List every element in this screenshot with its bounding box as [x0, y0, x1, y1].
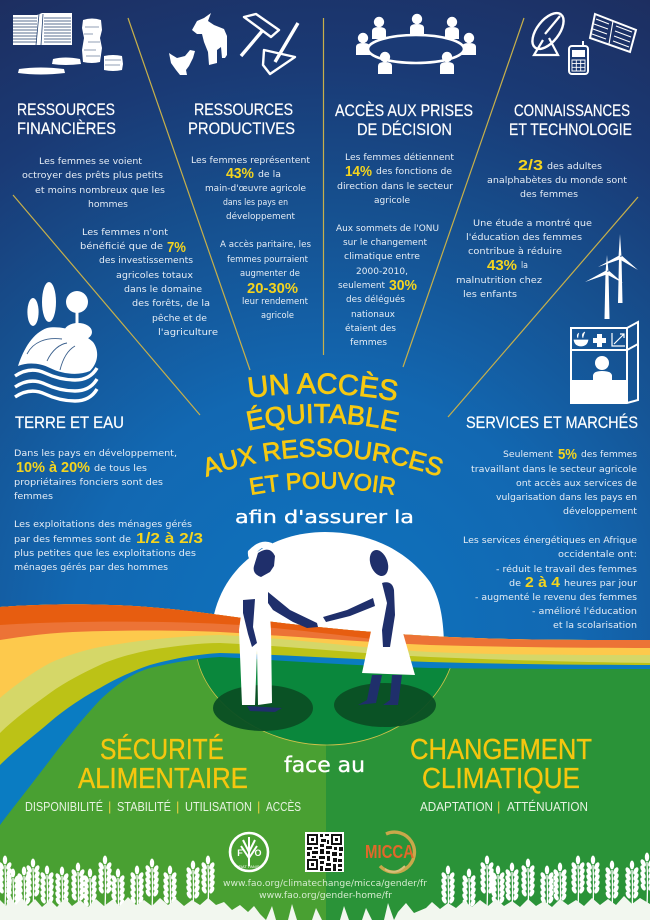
tags: climate actions: | — [497, 799, 500, 814]
heading: changement climatique — [410, 734, 592, 795]
panel: connaissances et technologie — [456, 8, 636, 300]
text block: pêche et de — [152, 313, 207, 324]
icon: goat, hen and tools — [169, 13, 298, 75]
icon: hill, trees and water — [15, 282, 97, 401]
logo: MICCA — [365, 832, 414, 872]
tags: food security dimensions: STABILITÉ — [117, 799, 171, 814]
text block: dans le domaine — [124, 284, 202, 295]
text block: - augmenté le revenu des femmes — [475, 592, 637, 603]
heading: DE DÉCISION — [357, 120, 452, 139]
title: un accès équitable aux ressources et pouvoir: AUX RESSOURCES — [206, 438, 443, 478]
text block — [463, 446, 637, 631]
text block: - amélioré l'éducation — [532, 606, 637, 617]
text block: main-d'œuvre agricole — [205, 183, 306, 194]
text block: 43% — [226, 165, 254, 182]
heading: PRODUCTIVES — [188, 120, 295, 138]
panel: terre et eau — [14, 282, 203, 573]
tags: food security dimensions: | — [257, 799, 260, 814]
icon: wind turbines — [585, 234, 638, 319]
text block: nationaux — [351, 309, 396, 320]
text block: femmes pourraient — [227, 254, 308, 265]
text block: des investissements — [99, 255, 193, 266]
text block: femmes — [14, 491, 53, 502]
text block: hommes — [88, 199, 128, 210]
text block: 7% — [167, 239, 186, 256]
text block: octroyer des prêts plus petits — [22, 170, 163, 181]
text block — [22, 156, 218, 338]
text block: 2000-2010, — [356, 266, 408, 277]
rainbow band — [0, 590, 650, 825]
text block: propriétaires fonciers sont des — [14, 477, 163, 488]
text block: sur le changement — [343, 237, 427, 248]
text block: malnutrition chez — [456, 275, 542, 286]
text block: des forêts, de la — [132, 298, 210, 309]
text block: et la scolarisation — [553, 620, 637, 631]
subtitle: afin d'assurer la: afin d'assurer la — [235, 507, 414, 528]
heading — [509, 102, 632, 139]
text block: les enfants — [463, 289, 517, 300]
tags: food security dimensions: | — [176, 799, 179, 814]
figure: man — [239, 542, 318, 712]
text block: contribue à réduire — [468, 246, 562, 257]
heading: sécurité alimentaire: ALIMENTAIRE — [78, 763, 248, 795]
text block: de — [509, 578, 521, 589]
heading: ACCÈS AUX PRISES — [335, 101, 473, 120]
text block: 43% — [487, 257, 517, 274]
heading: RESSOURCES — [17, 101, 115, 119]
text block: plus petites que les exploitations des — [14, 548, 196, 559]
heading: sécurité alimentaire — [78, 733, 248, 795]
text block: Les femmes détiennent — [345, 152, 454, 163]
text block: Les femmes se voient — [39, 156, 142, 167]
heading: TERRE ET EAU — [15, 414, 124, 432]
heading — [17, 101, 116, 138]
panel: services et marchés — [463, 234, 638, 631]
text block: 20-30% — [247, 280, 298, 297]
text block: agricole — [261, 310, 294, 321]
text block: des fonctions de — [376, 166, 452, 177]
text block: direction dans le secteur — [337, 181, 453, 192]
web links — [223, 879, 427, 901]
tags: food security dimensions: DISPONIBILITÉ — [25, 799, 103, 814]
text block: analphabètes du monde sont — [487, 175, 627, 186]
tags: food security dimensions — [25, 799, 301, 814]
text block: seulement — [338, 280, 385, 291]
text block: développement — [563, 506, 637, 517]
text block: Les femmes n'ont — [82, 227, 168, 238]
tags: climate actions — [420, 799, 588, 814]
text block: des femmes — [581, 449, 637, 460]
text block: 30% — [389, 277, 417, 294]
title: un accès équitable aux ressources et pouvoir — [206, 371, 443, 496]
text block: l'agriculture — [158, 327, 218, 338]
green ground — [0, 645, 650, 920]
figure: woman — [323, 547, 415, 705]
logo: FAO: F — [237, 848, 243, 858]
text block: occidentale ont: — [558, 549, 637, 560]
heading — [188, 101, 295, 138]
text block: des femmes — [520, 189, 578, 200]
text block: dans les pays en — [223, 197, 288, 208]
icon: market stall — [571, 322, 638, 403]
text block — [191, 155, 311, 321]
QR code — [305, 832, 344, 872]
text block: vulgarisation dans les pays en — [496, 492, 637, 503]
subtitle: face au: face au — [284, 753, 365, 777]
logo: FAO: O — [254, 848, 262, 858]
tags: food security dimensions: UTILISATION — [185, 799, 252, 814]
wheat field — [0, 852, 650, 920]
text block: 2/3 — [518, 157, 543, 174]
text block: par des femmes sont de — [14, 534, 131, 545]
dark green circle under figures — [196, 650, 455, 745]
tags: food security dimensions: ACCÈS — [266, 799, 301, 814]
text block: Les exploitations des ménages gérés — [14, 519, 192, 530]
heading: changement climatique: CLIMATIQUE — [422, 763, 580, 795]
heading — [335, 101, 473, 139]
text block: de la — [258, 169, 281, 180]
text block: ont accès aux services de — [516, 478, 637, 489]
panel: ressources financières — [13, 13, 218, 338]
text block: augmenter de — [240, 268, 300, 279]
text block — [14, 448, 203, 573]
text block: ménages gérés par des hommes — [14, 562, 168, 573]
text block: et moins nombreux que les — [35, 185, 165, 196]
text block: heures par jour — [564, 578, 637, 589]
text block: de tous les — [94, 463, 147, 474]
logo: FAO: FIAT PANIS — [238, 864, 260, 869]
text block: 2 à 4 — [525, 574, 561, 591]
shadow ellipses under figures — [213, 683, 436, 731]
text block: Dans les pays en développement, — [14, 448, 177, 459]
text block — [456, 157, 627, 300]
logo: MICCA: MICCA — [365, 842, 414, 862]
text block: - réduit le travail des femmes — [496, 564, 637, 575]
tags: climate actions: ADAPTATION — [420, 799, 493, 814]
text block: Les femmes représentent — [191, 155, 310, 166]
text block: Les services énergétiques en Afrique — [463, 535, 637, 546]
text block: étaient des — [345, 323, 396, 334]
icon: money stacks and coins — [13, 13, 123, 74]
panel: ressources productives — [169, 13, 311, 321]
tags: climate actions: ATTÉNUATION — [507, 799, 588, 814]
text block: 14% — [345, 163, 372, 180]
text block — [336, 152, 454, 348]
text block: 10% à 20% — [16, 459, 90, 476]
text block: Une étude a montré que — [473, 218, 592, 229]
logo: FAO — [230, 833, 268, 871]
text block: Seulement — [503, 449, 553, 460]
text block: agricoles totaux — [116, 270, 194, 281]
text block: des délégués — [346, 294, 405, 305]
icon: meeting around a table — [356, 14, 476, 74]
text block: Aux sommets de l'ONU — [336, 223, 439, 234]
text block: travaillant dans le secteur agricole — [471, 464, 637, 475]
text block: A accès paritaire, les — [220, 239, 311, 250]
heading: sécurité alimentaire: SÉCURITÉ — [100, 733, 224, 766]
white sun — [212, 532, 444, 650]
text block: l'éducation des femmes — [466, 232, 582, 243]
tags: food security dimensions: | — [108, 799, 111, 814]
title: un accès équitable aux ressources et pouvoir: ÉQUITABLE — [246, 404, 400, 432]
text block: 1/2 à 2/3 — [136, 530, 203, 547]
panel: accès aux prises de décision — [335, 14, 476, 348]
title: un accès équitable aux ressources et pouvoir: UN ACCÈS — [248, 371, 398, 400]
text block: développement — [226, 211, 295, 222]
heading: FINANCIÈRES — [17, 119, 116, 138]
title: un accès équitable aux ressources et pouvoir: ET POUVOIR — [250, 472, 395, 496]
text block: leur rendement — [242, 296, 308, 307]
icon: satellite dish, phone and book — [526, 8, 636, 74]
text block: 5% — [558, 446, 577, 463]
web links: www.fao.org/climatechange/micca/gender/fr — [223, 879, 427, 889]
text block: des adultes — [547, 161, 602, 172]
text block: agricole — [374, 195, 410, 206]
text block: la — [521, 260, 528, 271]
text block: femmes — [350, 337, 387, 348]
radiating dividers — [13, 18, 638, 417]
heading: changement climatique: CHANGEMENT — [410, 734, 592, 766]
text block: bénéficié que de — [80, 241, 163, 252]
web links: www.fao.org/gender-home/fr — [259, 891, 392, 901]
text block: climatique entre — [344, 251, 420, 262]
heading: RESSOURCES — [194, 101, 293, 119]
heading: ET TECHNOLOGIE — [509, 121, 632, 139]
